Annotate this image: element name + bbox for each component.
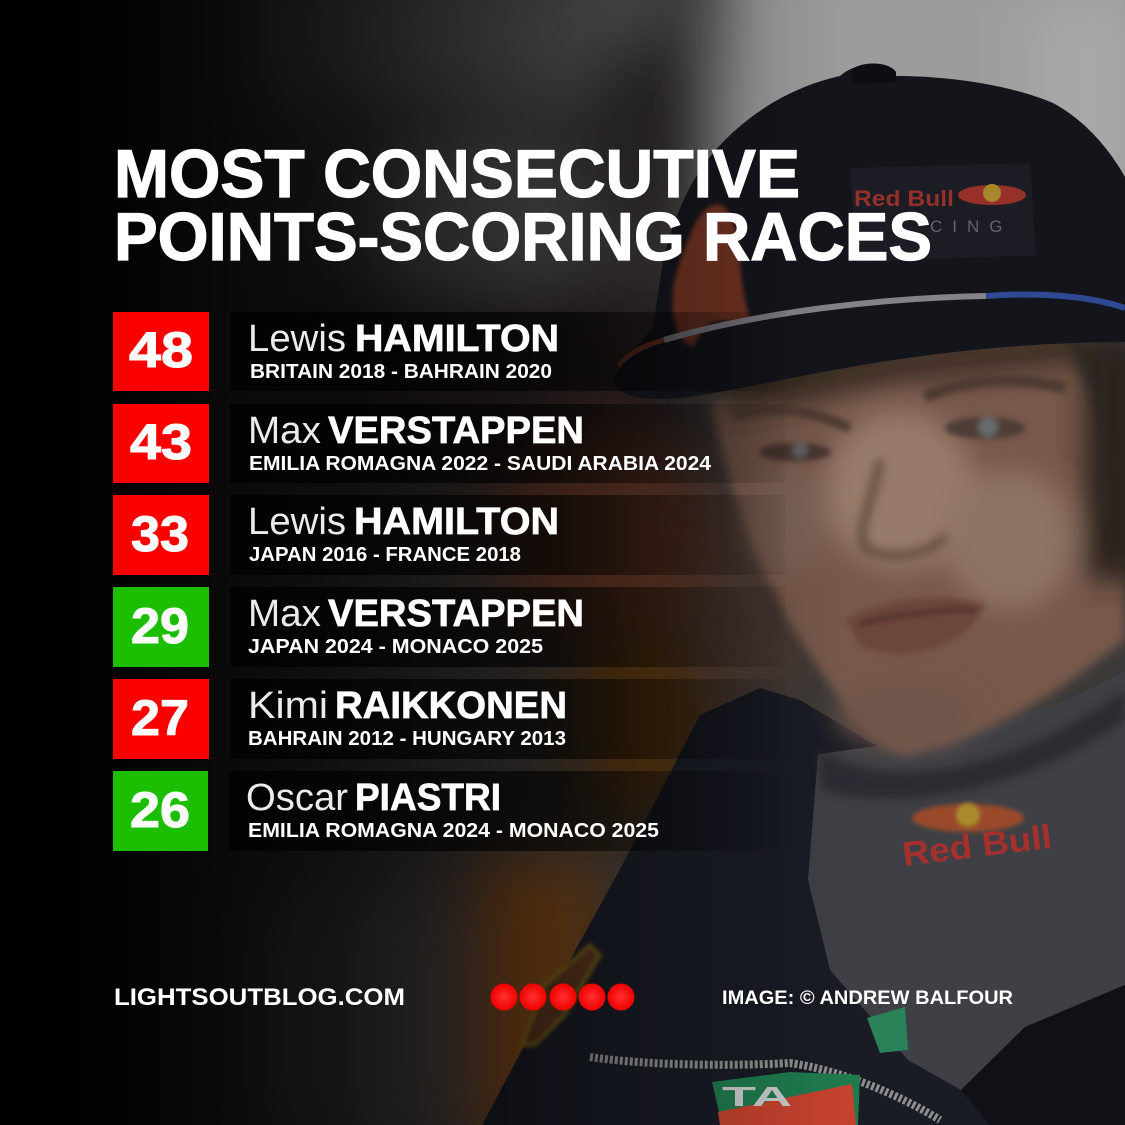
footer: website: LIGHTSOUTBLOG.COM (114, 984, 405, 1011)
jacket bull graphic (522, 945, 600, 1045)
badge: TAG Heuer: TA (722, 1081, 792, 1112)
row 6: Piastri 26: 26 (130, 782, 190, 838)
row 4: Verstappen 29: Max (248, 593, 321, 635)
row 6: Piastri 26 (113, 771, 785, 851)
row 2: Verstappen 43: Max (248, 410, 321, 452)
row 4: Verstappen 29: VERSTAPPEN (328, 593, 584, 635)
icon: five red start lights (490, 984, 634, 1010)
row 3: Hamilton 33: 33 (131, 506, 189, 562)
row 2: Verstappen 43 (113, 404, 785, 483)
cap brim stripe (618, 294, 1125, 366)
cap (612, 64, 1125, 399)
row 1: Hamilton 48: HAMILTON (355, 318, 559, 360)
mouth (845, 598, 985, 654)
title: POINTS-SCORING RACES (114, 199, 932, 275)
footer: image credit: IMAGE: © ANDREW BALFOUR (722, 988, 1013, 1009)
row 6: Piastri 26: PIASTRI (355, 777, 501, 819)
title: MOST CONSECUTIVE (114, 136, 800, 212)
title (114, 136, 932, 275)
nose (862, 460, 945, 555)
ranking list (113, 312, 785, 851)
eyebrows and eyes (735, 381, 1065, 461)
row 3: Hamilton 33: Lewis (248, 501, 346, 543)
row 5: Raikkonen 27: Kimi (248, 685, 328, 727)
row 3: Hamilton 33 (113, 495, 785, 575)
neck logo: Red Bull: Red Bull (900, 818, 1054, 874)
row 1: Hamilton 48 (113, 312, 785, 391)
row 5: Raikkonen 27: 27 (131, 690, 189, 746)
row 2: Verstappen 43: 43 (130, 414, 192, 470)
row 5: Raikkonen 27: BAHRAIN 2012 - HUNGARY 2013 (248, 728, 566, 750)
row 4: Verstappen 29: 29 (131, 598, 189, 654)
jacket and neck (482, 670, 1125, 1125)
row 1: Hamilton 48: Lewis (248, 318, 346, 360)
row 4: Verstappen 29 (113, 587, 785, 667)
cap logo: Red Bull: Red Bull (854, 186, 954, 211)
row 3: Hamilton 33: HAMILTON (354, 501, 559, 543)
row 3: Hamilton 33: JAPAN 2016 - FRANCE 2018 (249, 544, 521, 566)
cap logo: Red Bull: CING (930, 217, 1012, 236)
row 6: Piastri 26: Oscar (246, 777, 348, 819)
face (712, 330, 1125, 755)
row 1: Hamilton 48: 48 (129, 322, 193, 378)
cap logo: Red Bull (854, 184, 1026, 236)
jacket zipper (590, 1057, 940, 1120)
row 5: Raikkonen 27 (113, 679, 785, 759)
row 1: Hamilton 48: BRITAIN 2018 - BAHRAIN 2020 (250, 361, 552, 383)
row 2: Verstappen 43: EMILIA ROMAGNA 2022 - SAUDI ARABIA 2024 (249, 453, 712, 475)
badge: TAG Heuer (712, 1072, 860, 1125)
row 6: Piastri 26: EMILIA ROMAGNA 2024 - MONACO 2025 (248, 820, 659, 842)
row 2: Verstappen 43: VERSTAPPEN (328, 410, 584, 452)
row 4: Verstappen 29: JAPAN 2024 - MONACO 2025 (248, 636, 543, 658)
row 5: Raikkonen 27: RAIKKONEN (335, 685, 567, 727)
